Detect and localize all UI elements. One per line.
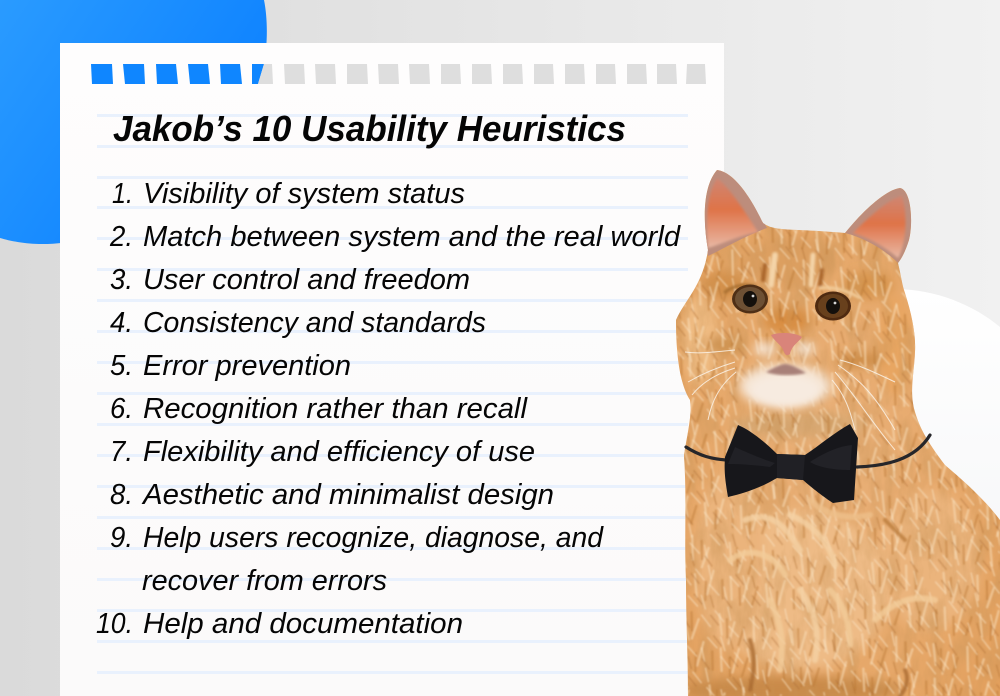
numbered list of heuristics: 1. [112, 178, 133, 210]
bow tie strap [686, 435, 930, 467]
numbered list of heuristics: User control and freedom [143, 264, 470, 296]
numbered list of heuristics: 7. [110, 436, 133, 468]
title: Jakob’s 10 Usability Heuristics [113, 108, 626, 149]
forehead stripes [725, 255, 860, 298]
left ear [705, 170, 767, 256]
numbered list of heuristics: 2. [109, 221, 133, 253]
numbered list of heuristics: 5. [110, 350, 133, 382]
progress strip of torn squares [91, 64, 706, 84]
numbered list of heuristics: 6. [110, 393, 133, 425]
mouth [766, 364, 806, 375]
right eye [815, 292, 851, 320]
fur texture [670, 160, 1000, 696]
right ear inner [853, 196, 905, 258]
numbered list of heuristics: Help and documentation [143, 608, 463, 640]
numbered list of heuristics: 10. [96, 608, 133, 640]
left ear inner [707, 178, 758, 248]
numbered list of heuristics: 8. [110, 479, 133, 511]
numbered list of heuristics: 4. [110, 307, 133, 339]
numbered list of heuristics: Aesthetic and minimalist design [141, 479, 554, 511]
numbered list of heuristics: Recognition rather than recall [143, 393, 529, 425]
cat body fur [670, 160, 1000, 696]
numbered list of heuristics: Match between system and the real world [143, 221, 681, 253]
chest fur strokes [730, 500, 935, 696]
cat illustration [670, 160, 1000, 696]
numbered list of heuristics: Error prevention [143, 350, 351, 382]
numbered list of heuristics: Consistency and standards [143, 307, 486, 339]
left eye [732, 284, 768, 314]
bow tie [725, 424, 858, 503]
fur hair layer [670, 225, 1000, 696]
fine hair layer [670, 225, 1000, 696]
nose [771, 333, 802, 355]
numbered list of heuristics [96, 178, 681, 640]
blue corner shape [0, 0, 267, 244]
whiskers [685, 350, 895, 450]
numbered list of heuristics: Visibility of system status [143, 178, 465, 210]
numbered list of heuristics: 9. [110, 522, 133, 554]
paper sheet [60, 43, 724, 696]
white blob behind cat [800, 289, 1000, 696]
muzzle [739, 343, 831, 408]
muzzle highlight [751, 375, 819, 405]
numbered list of heuristics: 3. [110, 264, 133, 296]
numbered list of heuristics: recover from errors [142, 565, 387, 597]
right ear [845, 188, 911, 263]
numbered list of heuristics: Help users recognize, diagnose, and [143, 522, 604, 554]
numbered list of heuristics: Flexibility and efficiency of use [143, 436, 535, 468]
